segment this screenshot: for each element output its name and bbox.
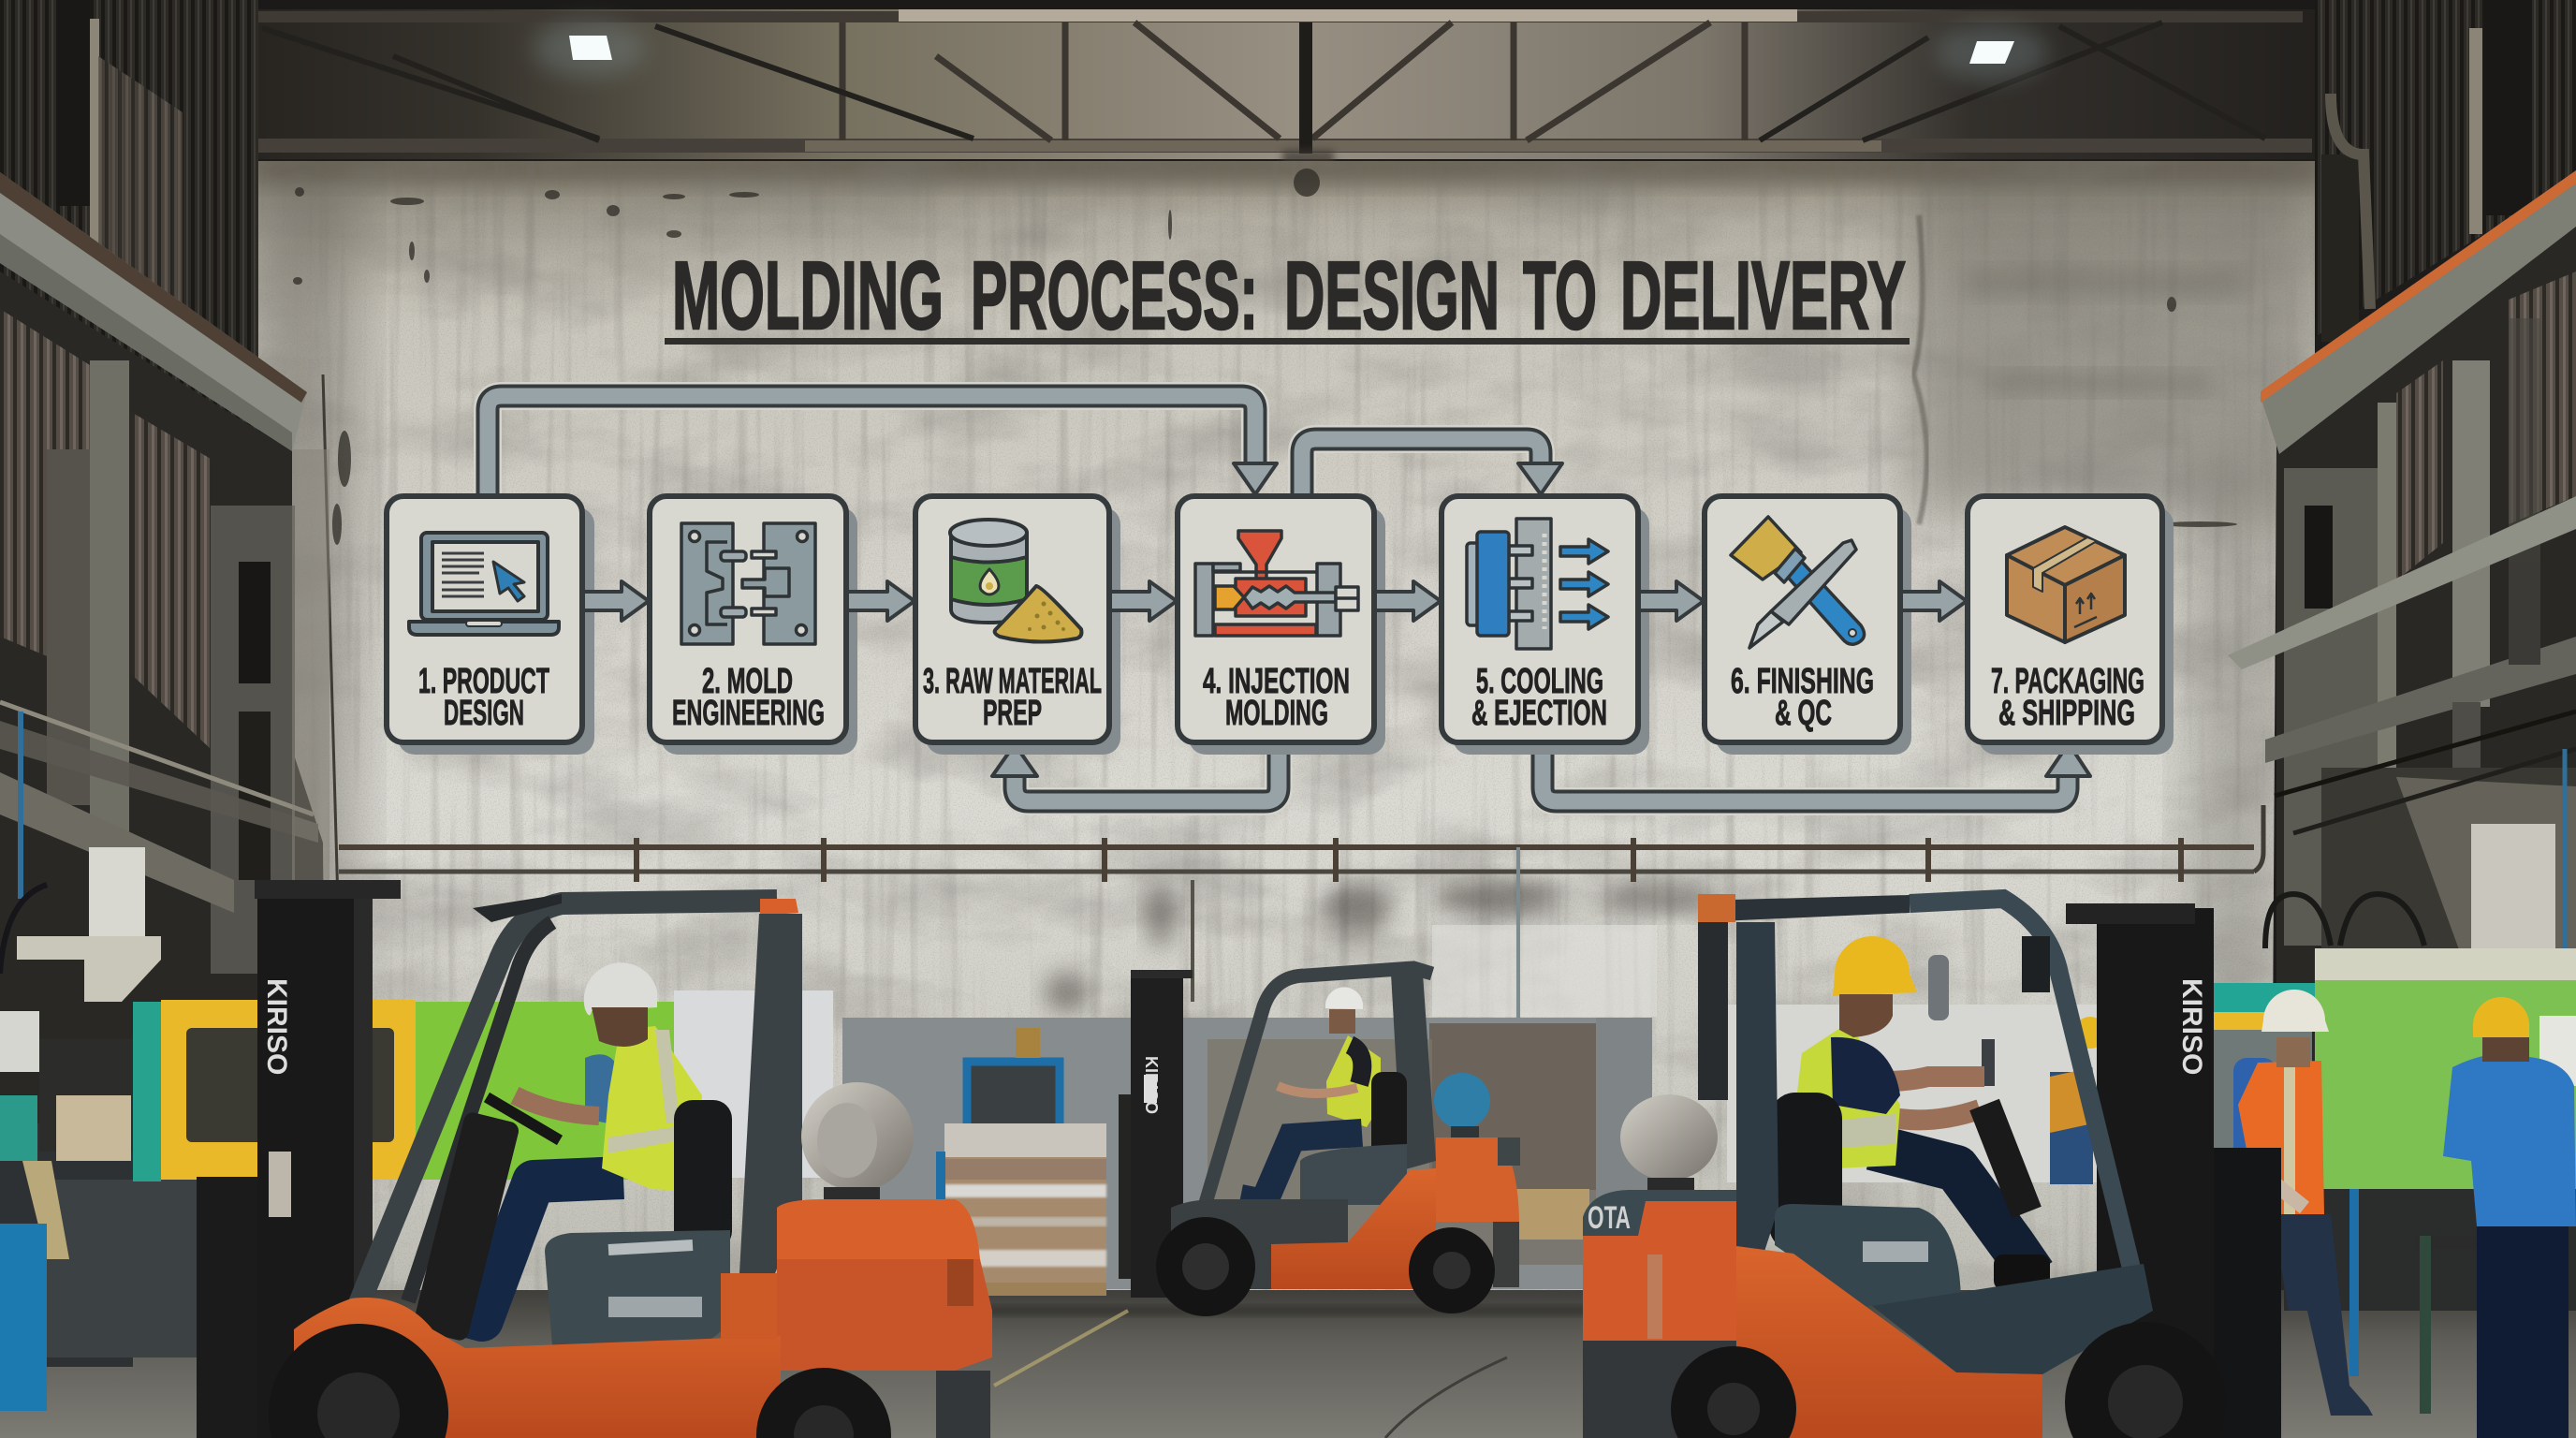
title: DESIGN — [1284, 242, 1500, 349]
right steel structure — [2228, 0, 2576, 1438]
icon: two-part mold — [681, 523, 815, 644]
panel: step 4 injection molding — [1178, 496, 1374, 742]
label: step 3: 3. RAW MATERIAL — [923, 662, 1102, 701]
roof truss — [84, 9, 2312, 197]
worker: blue shirt — [2443, 997, 2576, 1438]
pallet of boxes — [936, 1123, 1106, 1296]
concrete wall — [253, 154, 2321, 1329]
panel: step 3 raw material prep — [915, 496, 1109, 742]
label: step 1 — [418, 662, 549, 733]
connector arrow: step 4 back to step 3 — [992, 740, 1279, 801]
icon: drum and resin pile — [950, 520, 1081, 642]
label: step 3 — [923, 662, 1102, 733]
driver left — [447, 962, 732, 1320]
wall stain: lower dark patches — [1045, 880, 1713, 1013]
blue shelf — [964, 1028, 1062, 1125]
label: step 1: 1. PRODUCT — [418, 662, 549, 701]
connector arrow: step 5 to step 7 — [1543, 740, 2090, 801]
label: step 5: 5. COOLING — [1476, 662, 1603, 701]
label: step 3: PREP — [983, 694, 1042, 733]
label: step 4 — [1203, 662, 1350, 733]
label: step 4: 4. INJECTION — [1203, 662, 1350, 701]
label: step 5 — [1471, 662, 1607, 733]
label: step 1: DESIGN — [444, 694, 524, 733]
left steel structure — [0, 0, 329, 1438]
worker: orange vest — [2233, 990, 2373, 1416]
label: step 7 — [1991, 662, 2144, 733]
panel: step 5 cooling and ejection — [1442, 496, 1638, 742]
wall stain: top left drips — [293, 169, 2237, 545]
label: step 5: & EJECTION — [1471, 694, 1607, 733]
icon: cardboard box — [2007, 527, 2125, 642]
label: step 2 — [672, 662, 825, 733]
card shadows — [398, 507, 2174, 755]
icon: laptop — [409, 533, 559, 635]
crate behind centre forklift — [1515, 1189, 1589, 1240]
icon: ceiling light right — [1936, 24, 2048, 81]
step arrows between cards — [582, 581, 1967, 621]
panel: step 6 finishing and QC — [1705, 496, 1900, 742]
wall pipes — [323, 374, 2263, 1058]
forklift: centre: KIRISO — [1142, 1056, 1161, 1114]
icon: brush and knife — [1731, 517, 1865, 648]
forklift: left foreground: KIRISO — [261, 978, 292, 1075]
label: step 2: ENGINEERING — [672, 694, 825, 733]
label: step 7: & SHIPPING — [1998, 694, 2135, 733]
right machinery and cabinets — [1727, 894, 2576, 1414]
left injection machine — [0, 847, 833, 1367]
driver right — [1793, 936, 2050, 1290]
title: PROCESS: — [971, 242, 1258, 349]
forklift: right foreground: KIRISO — [2176, 978, 2207, 1075]
title: MOLDING — [672, 242, 944, 349]
label: step 2: 2. MOLD — [702, 662, 793, 701]
label: step 7: 7. PACKAGING — [1991, 662, 2144, 701]
connector arrow: step 4 to step 5 — [1302, 439, 1562, 498]
panel: step 2 mold engineering — [650, 496, 846, 742]
title — [665, 242, 1910, 349]
label: step 4: MOLDING — [1225, 694, 1328, 733]
label: step 6: & QC — [1775, 694, 1832, 733]
label: step 6: 6. FINISHING — [1731, 662, 1874, 701]
icon: ceiling light left — [534, 21, 646, 77]
forklift: left foreground — [197, 880, 992, 1438]
forklift: centre — [1119, 968, 1520, 1316]
title: DELIVERY — [1620, 242, 1906, 349]
connector arrow: step 1 to step 4 — [488, 396, 1277, 498]
forklift: right foreground: OTA — [1588, 1200, 1631, 1236]
label: step 6 — [1731, 662, 1874, 733]
lower wall dado and floor — [0, 1018, 2576, 1438]
panel: step 1 product design — [387, 496, 582, 742]
forklift: right foreground — [1583, 894, 2281, 1438]
blue bin — [0, 1224, 47, 1411]
title: TO — [1523, 242, 1597, 349]
icon: cooling plates and arrows — [1467, 519, 1608, 649]
panel: step 7 packaging and shipping — [1968, 496, 2162, 742]
worker: small background figure — [2050, 1017, 2106, 1184]
icon: injection machine — [1195, 531, 1358, 636]
